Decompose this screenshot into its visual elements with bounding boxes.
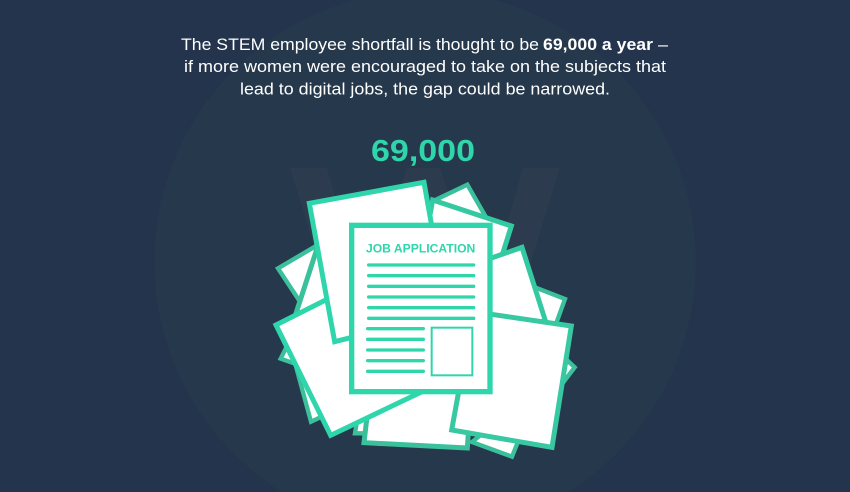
intro text: 69,000 a year bbox=[543, 35, 653, 54]
intro text: if more women were encouraged to take on the subjects that bbox=[184, 57, 666, 76]
intro text: lead to digital jobs, the gap could be narrowed. bbox=[240, 80, 610, 98]
left back sheet bbox=[296, 252, 347, 343]
intro text: – bbox=[658, 35, 669, 54]
form heading: JOB APPLICATION bbox=[366, 242, 475, 256]
top left sheet bbox=[309, 182, 447, 342]
intro text: The STEM employee shortfall is thought to be bbox=[181, 35, 539, 54]
lower right sheet bbox=[452, 312, 571, 447]
lower left sheet bbox=[276, 283, 420, 435]
form lines bbox=[368, 265, 474, 371]
upper right sheet bbox=[420, 200, 511, 283]
intro text bbox=[181, 35, 669, 98]
main application form bbox=[352, 225, 490, 392]
big number: 69,000 bbox=[371, 133, 475, 168]
bottom sheet bbox=[364, 377, 472, 448]
background circle bbox=[154, 0, 696, 492]
pile of job applications bbox=[276, 182, 575, 457]
photo box bbox=[432, 328, 472, 375]
right sheet bbox=[467, 247, 545, 337]
faint background letter bbox=[290, 168, 560, 330]
back sheets bbox=[278, 185, 575, 457]
